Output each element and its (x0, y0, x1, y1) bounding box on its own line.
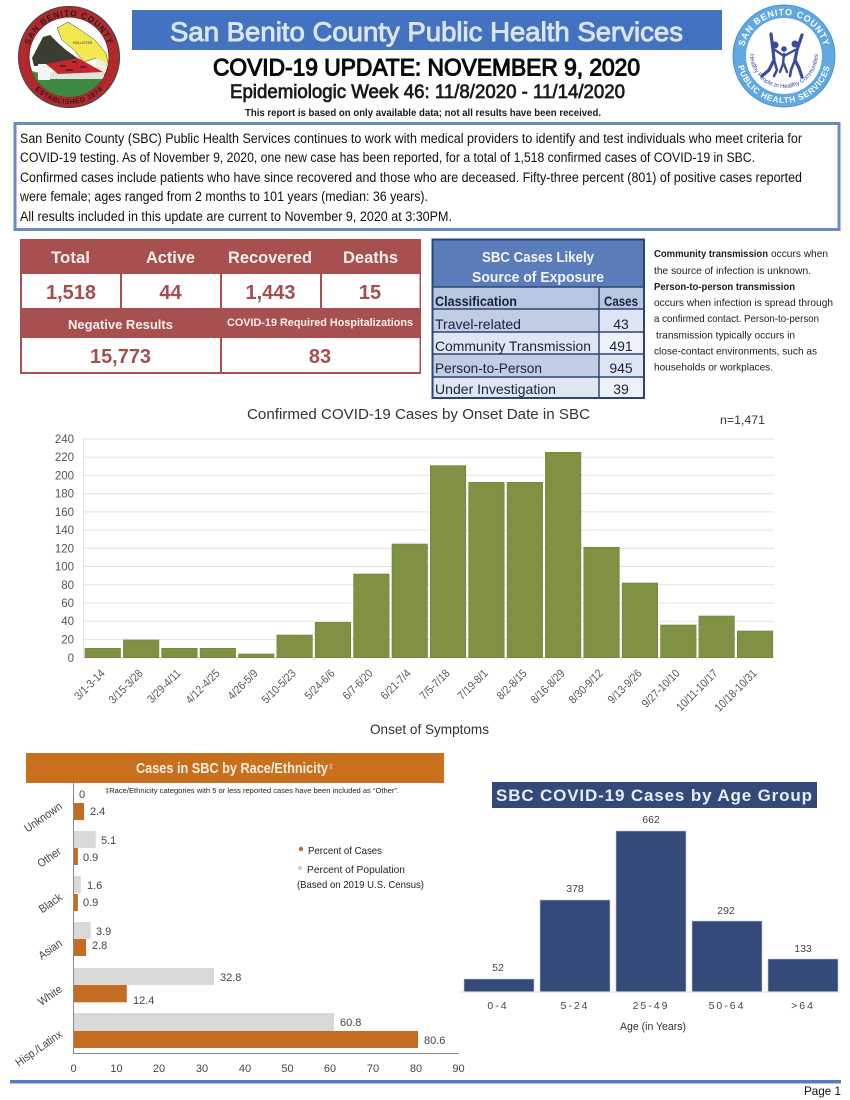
y axis labels: 100 (55, 562, 74, 574)
x axis labels: 30 (196, 1063, 208, 1075)
panel: likely source of exposure table: Under Investigation (435, 381, 556, 397)
category labels: 5-24 (560, 1000, 590, 1012)
x axis date labels: 3/1-3-14 (72, 667, 108, 703)
subtitle: epidemiologic week: Epidemiologic Week 46: 11/8/2020 - 11/14/2020 (230, 82, 625, 103)
bar value labels: 1.6 (87, 880, 102, 892)
bar value labels: 2.8 (92, 940, 107, 952)
text block: transmission definitions (654, 248, 833, 374)
text block: transmission definitions: occurs when (771, 248, 828, 260)
value labels: 52 (492, 962, 504, 974)
x axis date labels: 8/16-8/29 (529, 667, 568, 706)
bar value labels: 80.6 (424, 1035, 445, 1047)
x axis date labels (72, 667, 760, 714)
page number: Page 1 (804, 1084, 841, 1098)
bar value labels: 32.8 (220, 972, 241, 984)
chart: cases by age group (460, 782, 840, 1033)
panel: likely source of exposure table (432, 240, 644, 398)
panel: case totals table (20, 239, 421, 374)
heading banner: San Benito County Public Health Services (170, 17, 683, 47)
category labels: Black (37, 891, 65, 916)
chart: confirmed cases by onset date (55, 406, 774, 737)
x axis date labels: 10/11-10/17 (674, 667, 721, 714)
sample size: n=1,471 (720, 413, 765, 427)
bar value labels: 0.9 (83, 897, 98, 909)
chart header: Cases in SBC by Race/Ethnicity (136, 761, 328, 777)
panel: likely source of exposure table: SBC Cases Likely (482, 249, 595, 266)
x axis labels: 60 (324, 1063, 336, 1075)
bar value labels: 0.9 (83, 852, 98, 864)
panel: intro text (15, 124, 839, 230)
y axis labels: 140 (55, 525, 74, 537)
panel: case totals table: Negative Results (68, 317, 173, 332)
icon: San Benito County seal: SAN BENITO COUNTY (25, 10, 114, 44)
x axis date labels: 3/15-3/28 (107, 667, 146, 706)
icon: San Benito County seal: HOLLISTER (73, 41, 93, 45)
bar value labels: 60.8 (340, 1017, 361, 1029)
heading banner (132, 10, 722, 50)
x axis date labels: 4/12-4/25 (184, 667, 223, 706)
panel: intro text: San Benito County (SBC) Public Health Services continues to work with medical providers to identify and test individuals who meet criteria for (20, 131, 802, 146)
panel: intro text: were female; ages ranged from 2 months to 101 years (median: 36 years). (19, 189, 428, 204)
chart header: SBC COVID-19 Cases by Age Group (496, 786, 812, 805)
icon: Public Health Services logo: SAN BENITO COUNTY (738, 8, 830, 46)
panel: case totals table: 15,773 (90, 346, 151, 368)
x axis labels: 90 (452, 1063, 465, 1075)
legend: Percent of Population (307, 864, 405, 876)
panel: likely source of exposure table: Cases (604, 293, 638, 309)
panel: intro text: COVID-19 testing. As of November 9, 2020, one new case has been reported, for a total of 1,518 confirmed cases of COVID-19 in SBC. (20, 150, 755, 165)
x axis title: Age (in Years) (620, 1021, 686, 1033)
panel: case totals table: Total (51, 248, 90, 267)
bar value labels (79, 789, 445, 1047)
gray population bars (74, 831, 334, 1031)
y axis labels: 200 (55, 470, 74, 482)
panel: case totals table: 1,443 (246, 282, 296, 304)
chart: cases by race and ethnicity (13, 753, 465, 1075)
x axis date labels: 8/30-9/12 (567, 667, 606, 706)
panel: case totals table: 44 (159, 282, 182, 304)
title: COVID-19 UPDATE: NOVEMBER 9, 2020 (213, 54, 640, 82)
category labels: 0-4 (487, 1000, 509, 1012)
bars (464, 831, 838, 992)
value labels: 662 (642, 814, 660, 826)
y axis labels: 220 (55, 452, 74, 464)
category labels: White (36, 983, 65, 1009)
panel: case totals table: Active (146, 248, 195, 267)
x axis labels: 10 (110, 1063, 123, 1075)
category labels: 50-64 (709, 1000, 745, 1012)
bar value labels: 2.4 (90, 806, 105, 818)
bar value labels: 12.4 (133, 995, 154, 1007)
y axis labels: 40 (61, 616, 74, 628)
y axis labels: 120 (55, 544, 74, 556)
x axis title: Onset of Symptoms (370, 721, 489, 737)
legend (297, 845, 424, 891)
chart title: Confirmed COVID-19 Cases by Onset Date in SBC (247, 406, 590, 423)
y axis labels: 160 (55, 507, 74, 519)
x axis date labels: 8/2-8/15 (494, 667, 530, 703)
panel: intro text: Confirmed cases include patients who have since recovered and those who are deceased. Fifty-three percent (801) of positive cases reported (20, 170, 802, 185)
x axis labels: 20 (153, 1063, 165, 1075)
value labels (492, 814, 812, 974)
footer rule (10, 1080, 841, 1084)
legend: Percent of Cases (308, 845, 382, 857)
x axis date labels: 5/24-6/6 (302, 667, 338, 703)
text block: transmission definitions: close-contact environments, such as (654, 346, 817, 358)
icon: San Benito County seal (18, 6, 120, 108)
category labels (487, 1000, 815, 1012)
icon: Public Health Services logo (732, 4, 836, 108)
x axis date labels: 7/5-7/18 (417, 667, 453, 703)
panel: case totals table: 15 (359, 282, 381, 304)
text block: transmission definitions: households or workplaces. (654, 362, 773, 374)
text block: transmission definitions: the source of infection is unknown. (654, 265, 811, 277)
panel: case totals table: 83 (309, 346, 331, 368)
x axis labels: 80 (410, 1063, 422, 1075)
x axis labels: 50 (281, 1063, 294, 1075)
x axis date labels: 7/19-8/1 (455, 667, 491, 703)
y axis labels: 180 (55, 488, 74, 500)
panel: case totals table: COVID-19 Required Hospitalizations (227, 317, 413, 329)
icon: Public Health Services logo: Healthy People In Healthy Communities (750, 54, 818, 88)
chart header: ‡ (329, 764, 333, 771)
panel: case totals table: 1,518 (46, 282, 96, 304)
y axis labels: 60 (61, 598, 74, 610)
bar value labels: 3.9 (96, 926, 111, 938)
text block: transmission definitions: transmission typically occurs in (656, 330, 795, 342)
category labels (13, 800, 65, 1070)
x axis date labels: 3/29-4/11 (145, 667, 184, 706)
x axis date labels: 6/21-7/4 (378, 667, 414, 703)
x axis labels (70, 1063, 465, 1075)
x axis date labels: 4/26-5/9 (225, 667, 261, 703)
footnote: ‡Race/Ethnicity categories with 5 or less reported cases have been included as “Other”. (105, 786, 399, 795)
panel: likely source of exposure table: Classification (435, 293, 517, 309)
value labels: 292 (717, 905, 735, 917)
x axis labels: 70 (367, 1063, 379, 1075)
bar value labels: 0 (79, 789, 85, 801)
panel: likely source of exposure table: Source of Exposure (472, 269, 604, 286)
y axis labels: 20 (61, 634, 74, 646)
text block: transmission definitions: Community transmission (654, 248, 768, 260)
category labels: Other (35, 845, 64, 870)
category labels: Hisp./Latinx (13, 1028, 65, 1070)
panel: likely source of exposure table: Travel-related (435, 316, 521, 332)
x axis date labels: 9/13-9/26 (606, 667, 645, 706)
icon: Public Health Services logo: PUBLIC HEALTH SERVICES (738, 65, 830, 103)
y axis labels: 0 (68, 653, 74, 665)
report note: This report is based on only available data; not all results have been received. (245, 108, 601, 119)
panel: intro text: All results included in this update are current to November 9, 2020 at 3:30PM. (20, 209, 452, 224)
x axis date labels: 5/10-5/23 (260, 667, 299, 706)
x axis date labels: 6/7-6/20 (340, 667, 376, 703)
category labels: 25-49 (633, 1000, 669, 1012)
icon: San Benito County seal: ESTABLISHED 1874 (35, 86, 102, 104)
bar value labels: 5.1 (101, 835, 116, 847)
panel: likely source of exposure table: 491 (609, 338, 633, 354)
y axis labels (55, 434, 74, 665)
y axis labels: 80 (61, 580, 74, 592)
orange case bars (74, 803, 418, 1048)
text block: transmission definitions: a confirmed contact. Person-to-person (654, 313, 819, 325)
x axis labels: 0 (70, 1063, 77, 1075)
panel: case totals table: Recovered (228, 248, 312, 267)
chart header (26, 753, 444, 783)
x axis date labels: 9/27-10/10 (640, 667, 683, 710)
bars (85, 452, 773, 658)
category labels: Asian (36, 937, 65, 962)
x axis labels: 40 (239, 1063, 251, 1075)
text block: transmission definitions: occurs when infection is spread through (654, 297, 833, 309)
value labels: 133 (794, 943, 812, 955)
panel: likely source of exposure table: Person-to-Person (435, 360, 542, 376)
category labels: >64 (791, 1000, 815, 1012)
panel: likely source of exposure table: Community Transmission (435, 338, 591, 354)
panel: likely source of exposure table: 945 (609, 360, 633, 376)
panel: likely source of exposure table: 43 (613, 316, 629, 332)
y axis labels: 240 (55, 434, 74, 446)
value labels: 378 (566, 883, 584, 895)
category labels: Unknown (22, 800, 65, 835)
panel: likely source of exposure table: 39 (613, 381, 629, 397)
text block: transmission definitions: Person-to-person transmission (654, 281, 795, 293)
legend: (Based on 2019 U.S. Census) (297, 879, 424, 891)
x axis date labels: 10/18-10/31 (713, 667, 760, 714)
panel: case totals table: Deaths (343, 248, 398, 267)
